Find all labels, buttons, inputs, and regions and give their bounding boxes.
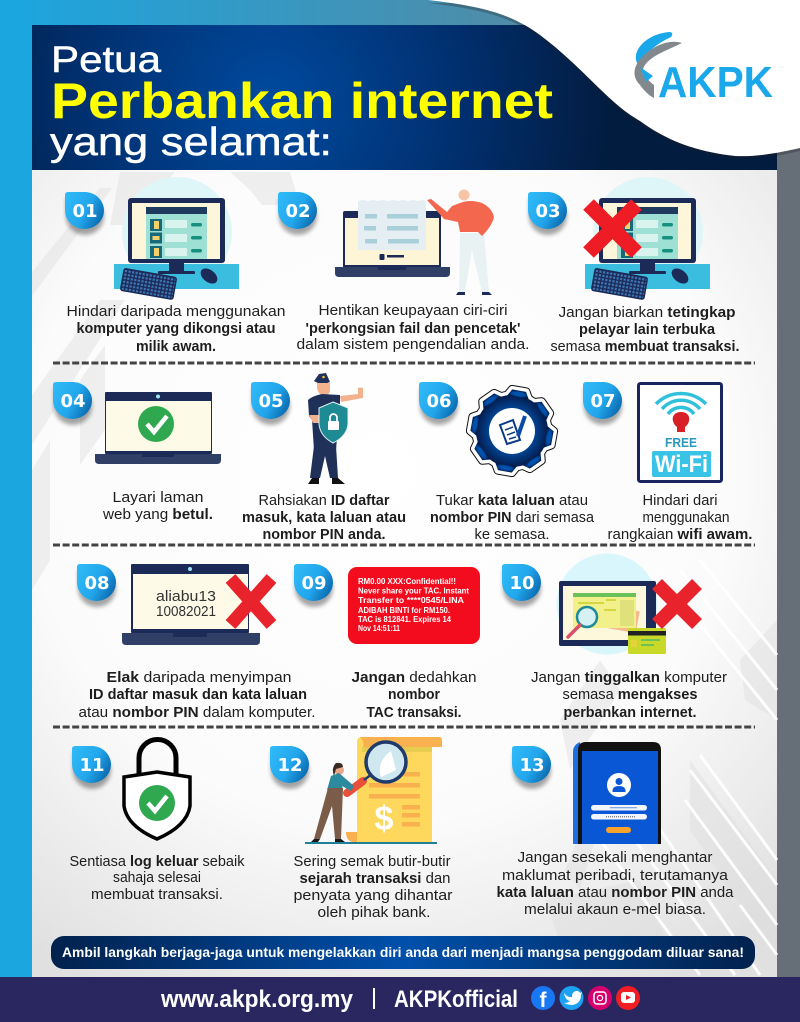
caption 04: web yang betul. xyxy=(102,507,213,523)
badge 01 xyxy=(65,192,104,235)
caption 05: masuk, kata laluan atau xyxy=(242,510,406,526)
badge 13: 13 xyxy=(519,755,545,776)
footer website and handle xyxy=(160,986,518,1013)
badge 02: 02 xyxy=(285,201,311,222)
caption 05: Rahsiakan ID daftar xyxy=(258,493,390,509)
title xyxy=(50,39,553,164)
caption 10: Jangan tinggalkan komputer xyxy=(531,670,727,686)
tip 08 xyxy=(77,564,316,721)
footer website and handle: AKPKofficial xyxy=(394,986,518,1013)
badge 06 xyxy=(419,382,458,425)
tip 07 xyxy=(583,382,752,543)
white header curve shadow xyxy=(428,0,800,159)
badge 02 xyxy=(278,192,317,235)
caption 01: komputer yang dikongsi atau xyxy=(76,321,276,337)
badge 13 xyxy=(512,746,551,789)
icon: red cross xyxy=(230,578,272,624)
icon: free wifi sign: Wi-Fi xyxy=(655,451,708,478)
caption 08: atau nombor PIN dalam komputer. xyxy=(78,705,316,721)
caption 13: Jangan sesekali menghantar xyxy=(518,850,713,866)
tip 02 xyxy=(278,190,530,353)
caption 07: Hindari dari xyxy=(642,493,718,509)
badge 03 xyxy=(528,192,567,235)
caption 08 xyxy=(78,670,316,721)
caption 01: Hindari daripada menggunakan xyxy=(66,304,286,320)
right grey strip xyxy=(777,20,800,978)
caption 09: TAC transaksi. xyxy=(366,705,462,721)
tip 05 xyxy=(242,373,406,543)
illustration: red TAC SMS message: TAC is 812841. Expires 14 xyxy=(358,614,451,624)
caption 03 xyxy=(550,305,740,355)
illustration: bank statement scroll with magnifier: $ xyxy=(375,800,394,838)
social icons: f xyxy=(540,989,548,1012)
caption 13: melalui akaun e-mel biasa. xyxy=(524,902,706,918)
illustration: red TAC SMS message: Nov 14:51:11 xyxy=(358,623,400,633)
tip 03 xyxy=(528,177,740,355)
illustration: laptop with document and man xyxy=(335,190,494,295)
caption 01 xyxy=(66,304,286,355)
white header curve xyxy=(428,0,800,156)
tip 04 xyxy=(53,382,221,523)
icon: gear with document xyxy=(465,384,559,478)
badge 03: 03 xyxy=(535,201,561,222)
caption 08: ID daftar masuk dan kata laluan xyxy=(89,687,307,703)
badge 12: 12 xyxy=(277,755,303,776)
caption 13 xyxy=(496,850,734,918)
AKPK logo xyxy=(634,32,773,107)
tip 01 xyxy=(65,177,286,355)
left blue strip xyxy=(0,0,32,978)
illustration: red TAC SMS message: RM0.00 XXX:Confidential!! xyxy=(358,576,456,586)
badge 08 xyxy=(77,564,116,607)
caption 07: rangkaian wifi awam. xyxy=(608,527,752,543)
badge 10: 10 xyxy=(509,573,535,594)
badge 10 xyxy=(502,564,541,607)
title: yang selamat: xyxy=(50,121,332,164)
tip 12 xyxy=(270,737,453,921)
illustration: bank statement scroll with magnifier xyxy=(305,737,442,844)
caption 05 xyxy=(242,493,406,543)
caption 11: sahaja selesai xyxy=(113,870,201,886)
caption 06: nombor PIN dari semasa xyxy=(430,510,595,526)
caption 04 xyxy=(102,490,213,523)
caption 09: Jangan dedahkan xyxy=(352,670,476,686)
caption 07 xyxy=(608,493,752,543)
badge 04: 04 xyxy=(60,391,86,412)
AKPK logo: AKPK xyxy=(658,58,773,107)
badge 09: 09 xyxy=(301,573,327,594)
caption 01: milik awam. xyxy=(136,339,216,355)
badge 05 xyxy=(251,382,290,425)
illustration: police officer with shield xyxy=(308,373,363,484)
caption 09: nombor xyxy=(388,687,440,703)
caption 02: 'perkongsian fail dan pencetak' xyxy=(306,321,520,337)
caption 06 xyxy=(430,493,595,543)
illustration: desktop computer xyxy=(114,177,239,299)
top band xyxy=(0,0,800,26)
icon: red cross xyxy=(588,204,636,252)
footer xyxy=(0,977,800,1022)
badge 12 xyxy=(270,746,309,789)
caption 13: kata laluan atau nombor PIN anda xyxy=(496,885,734,901)
caption 12: sejarah transaksi dan xyxy=(300,871,450,887)
icon: free wifi sign xyxy=(638,384,722,482)
tip 13 xyxy=(496,742,734,918)
illustration: tablet with document and card xyxy=(556,554,666,654)
caption 07: menggunakan xyxy=(642,510,730,526)
illustration: laptop with saved password xyxy=(122,564,260,645)
divider 1 xyxy=(53,362,755,364)
caption 13: maklumat peribadi, terutamanya xyxy=(502,868,729,884)
caption 11 xyxy=(69,854,245,903)
badge 06: 06 xyxy=(426,391,452,412)
caption 10: perbankan internet. xyxy=(564,705,696,721)
tip 11 xyxy=(69,740,245,903)
warning banner: Ambil langkah berjaga-jaga untuk mengelakkan diri anda dari menjadi mangsa penggodam diluar sana! xyxy=(62,944,744,960)
caption 02: Hentikan keupayaan ciri-ciri xyxy=(318,303,508,319)
badge 05: 05 xyxy=(258,391,284,412)
title: Perbankan internet xyxy=(51,73,553,129)
tip 06 xyxy=(419,382,595,543)
content panel background xyxy=(32,170,777,977)
caption 03: Jangan biarkan tetingkap xyxy=(558,305,736,321)
header panel xyxy=(32,25,777,170)
badge 11 xyxy=(72,746,111,789)
caption 06: ke semasa. xyxy=(474,527,550,543)
tip 09 xyxy=(294,564,480,721)
caption 02: dalam sistem pengendalian anda. xyxy=(296,337,530,353)
illustration: red TAC SMS message: Transfer to ****0545/LINA xyxy=(358,595,464,605)
title: Petua xyxy=(51,39,161,80)
illustration: red TAC SMS message xyxy=(348,567,480,644)
caption 12: oleh pihak bank. xyxy=(318,905,430,921)
badge 04 xyxy=(53,382,92,425)
caption 11: membuat transaksi. xyxy=(91,887,223,903)
icon: red cross xyxy=(657,584,697,624)
badge 11: 11 xyxy=(79,755,105,776)
caption 03: pelayar lain terbuka xyxy=(579,322,716,338)
caption 11: Sentiasa log keluar sebaik xyxy=(69,854,245,870)
illustration: red TAC SMS message: Never share your TAC. Instant xyxy=(358,586,469,596)
icon: padlock shield with check xyxy=(124,740,190,839)
caption 10 xyxy=(531,670,727,721)
illustration: red TAC SMS message: ADIBAH BINTI for RM150. xyxy=(358,605,450,615)
caption 08: Elak daripada menyimpan xyxy=(106,670,292,686)
caption 02 xyxy=(296,303,530,353)
social icons xyxy=(531,986,640,1012)
caption 09 xyxy=(352,670,476,721)
caption 06: Tukar kata laluan atau xyxy=(436,493,588,509)
caption 10: semasa mengakses xyxy=(562,687,698,703)
divider 3 xyxy=(53,726,755,728)
badge 08: 08 xyxy=(84,573,110,594)
illustration: laptop with saved password: 10082021 xyxy=(156,604,216,620)
badge 07: 07 xyxy=(590,391,616,412)
caption 12: penyata yang dihantar xyxy=(294,888,453,904)
divider 2 xyxy=(53,544,755,546)
warning banner xyxy=(51,936,755,969)
illustration: laptop with saved password: aliabu13 xyxy=(156,589,216,605)
badge 07 xyxy=(583,382,622,425)
caption 04: Layari laman xyxy=(112,490,204,506)
caption 12: Sering semak butir-butir xyxy=(294,854,451,870)
icon: free wifi sign: FREE xyxy=(665,436,697,450)
illustration: laptop with check xyxy=(95,392,221,464)
illustration: desktop computer xyxy=(585,177,710,299)
tip 10 xyxy=(502,554,727,721)
caption 05: nombor PIN anda. xyxy=(262,527,386,543)
footer website and handle: www.akpk.org.my xyxy=(160,986,354,1013)
caption 03: semasa membuat transaksi. xyxy=(550,339,740,355)
badge 09 xyxy=(294,564,333,607)
illustration: smartphone login screen xyxy=(573,742,661,844)
badge 01: 01 xyxy=(72,201,98,222)
caption 12 xyxy=(294,854,453,921)
